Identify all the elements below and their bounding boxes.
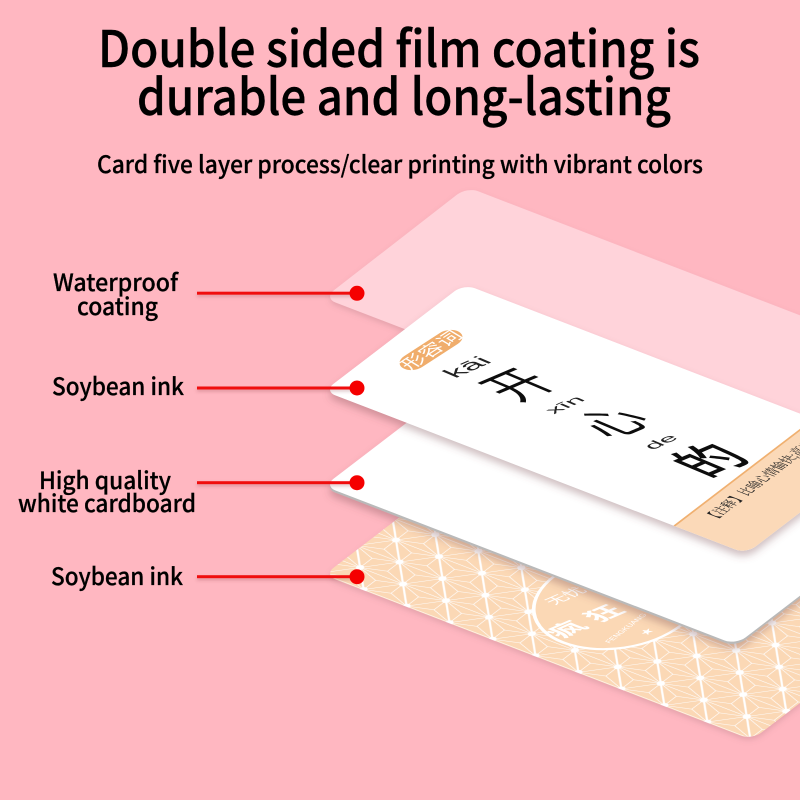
callout: soybean ink back: Soybean ink	[51, 557, 183, 592]
callout: white cardboard: white cardboard	[18, 484, 196, 519]
layer: white cardboard	[322, 379, 800, 647]
callout: waterproof coating: coating	[77, 287, 158, 322]
logo star: ★	[639, 627, 657, 637]
subtitle: Card five layer process/clear printing with vibrant colors	[97, 145, 703, 180]
logo word main: 疯狂	[540, 599, 642, 641]
word with pinyin: kāi	[435, 353, 498, 380]
title	[98, 10, 700, 130]
logo ring	[500, 535, 735, 667]
logo small text: FENGKUANG	[603, 612, 649, 644]
badge: 形容词	[396, 328, 467, 373]
word with pinyin: de	[639, 432, 683, 452]
callout: waterproof coating	[53, 263, 364, 322]
title: Double sided film coating is	[98, 10, 700, 82]
callout: soybean ink back	[51, 557, 364, 592]
word with pinyin: 开	[467, 363, 572, 408]
word with pinyin: xīn	[540, 394, 589, 416]
word with pinyin	[435, 353, 765, 483]
callout: white cardboard	[18, 461, 364, 519]
callout: soybean ink front	[52, 367, 364, 402]
callout: waterproof coating: Waterproof	[53, 263, 180, 298]
word with pinyin: 心	[562, 400, 667, 445]
card footer band	[674, 428, 800, 551]
layer: waterproof coating	[324, 187, 800, 462]
layer: patterned back card	[324, 468, 800, 740]
title: durable and long-lasting	[137, 58, 671, 130]
callout: white cardboard: High quality	[39, 461, 171, 496]
layer: printed front card	[324, 284, 800, 555]
logo word top: 无忧	[540, 585, 591, 607]
word with pinyin: 的	[657, 438, 765, 483]
callout: soybean ink front: Soybean ink	[52, 367, 184, 402]
